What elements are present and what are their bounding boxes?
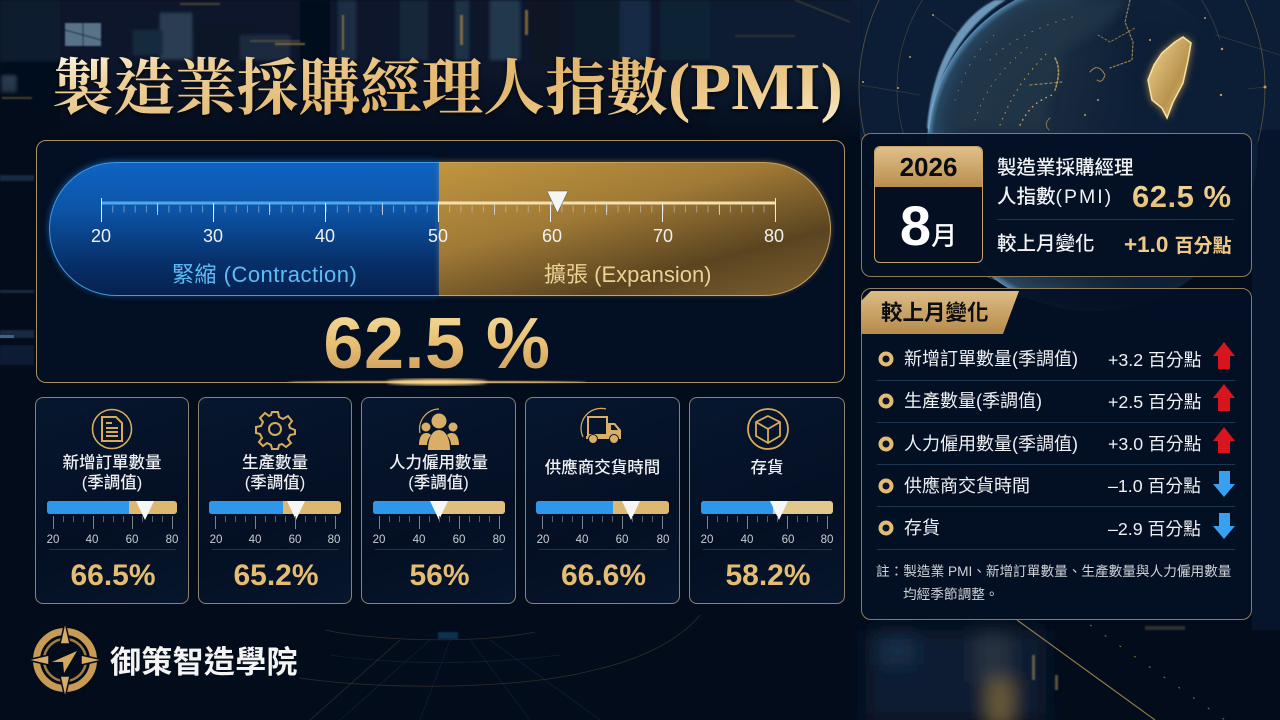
label: 人力僱用數量 — [389, 454, 488, 472]
date badge — [874, 146, 983, 263]
tab heading: 較上月變化 — [881, 301, 989, 325]
bottom-right reflection — [866, 630, 1046, 720]
bright factory window — [65, 23, 101, 46]
PMI label: 人指數(PMI) — [997, 186, 1113, 208]
down arrows — [1213, 471, 1235, 539]
main scale: 60 — [542, 226, 562, 246]
label — [242, 454, 308, 492]
card: employment — [361, 397, 516, 604]
slider: 60 — [616, 534, 628, 546]
change label: 較上月變化 — [997, 233, 1095, 255]
panel: change from last month: +2.5 百分點 — [1108, 392, 1201, 412]
main marker — [547, 191, 568, 213]
PMI label — [997, 157, 1134, 208]
year — [875, 147, 982, 187]
contraction half — [49, 162, 439, 296]
up arrows — [1213, 342, 1235, 453]
expansion half — [439, 162, 831, 296]
icon: truck — [580, 408, 621, 443]
icon: document — [92, 408, 132, 450]
footnote: 註：製造業 PMI、新增訂單數量、生產數量與人力僱用數量 — [876, 564, 1231, 579]
slider: 20 — [537, 534, 549, 546]
tab heading — [861, 291, 1019, 334]
bullets — [880, 354, 892, 534]
panel: change from last month: +3.0 百分點 — [1108, 434, 1201, 454]
slider: 80 — [493, 534, 505, 546]
slider: 40 — [576, 534, 588, 546]
value: 56% — [409, 559, 470, 592]
slider: 80 — [657, 534, 669, 546]
row 3: 人力僱用數量(季調值) — [904, 434, 1078, 454]
city lights — [955, 0, 1135, 130]
label: 存貨 — [750, 459, 784, 477]
label — [62, 454, 162, 492]
label: (季調值) — [82, 474, 142, 492]
slider: 60 — [126, 534, 138, 546]
label: 供應商交貨時間 — [545, 459, 660, 477]
slider: 40 — [86, 534, 98, 546]
label: (季調值) — [245, 474, 305, 492]
main scale: 20 — [91, 226, 111, 246]
slider: 80 — [166, 534, 178, 546]
footnote — [876, 564, 1231, 602]
main scale — [91, 190, 784, 386]
month: 8月 — [900, 194, 957, 257]
slider: 20 — [210, 534, 222, 546]
row 2: 生產數量(季調值) — [904, 391, 1042, 411]
icon: gear — [255, 411, 296, 450]
card: supplier delivery time — [525, 397, 680, 604]
panel: change from last month: +3.2 百分點 — [1108, 350, 1201, 370]
slider: 40 — [741, 534, 753, 546]
title: 製造業採購經理人指數(PMI) — [52, 50, 843, 124]
slider: 20 — [47, 534, 59, 546]
label: (季調值) — [408, 474, 469, 492]
slider — [47, 501, 178, 550]
icon: Taiwan map — [1142, 32, 1196, 120]
land glow — [950, 0, 1130, 132]
slider — [373, 501, 505, 550]
big value: 62.5 % — [323, 304, 551, 384]
card: production — [198, 397, 352, 604]
panel: change from last month: –1.0 百分點 — [1108, 476, 1201, 496]
main scale: 70 — [653, 226, 673, 246]
card: inventories — [689, 397, 845, 604]
row 1: 新增訂單數量(季調值) — [904, 349, 1078, 369]
slider: 20 — [701, 534, 713, 546]
footnote: 均經季節調整。 — [903, 586, 998, 602]
expansion label: 擴張 (Expansion) — [544, 262, 712, 287]
slider — [701, 501, 833, 550]
slider: 60 — [782, 534, 794, 546]
bottom grid arcs — [300, 615, 700, 720]
label: 新增訂單數量 — [62, 454, 162, 472]
value: 58.2% — [725, 559, 811, 592]
slider: 60 — [453, 534, 465, 546]
label: 生產數量 — [242, 454, 308, 472]
contraction label: 緊縮 (Contraction) — [172, 262, 357, 287]
PMI label: 製造業採購經理 — [997, 157, 1134, 179]
left edge streaks — [0, 175, 34, 365]
slider — [536, 501, 669, 550]
divider — [997, 219, 1234, 220]
slider: 80 — [328, 534, 340, 546]
main scale: 50 — [428, 226, 448, 246]
main scale: 40 — [315, 226, 335, 246]
row 5: 存貨 — [904, 518, 940, 538]
icon: box — [747, 408, 789, 450]
value: 65.2% — [233, 559, 319, 592]
slider — [209, 501, 341, 550]
panel: change from last month — [861, 288, 1252, 620]
main scale: 30 — [203, 226, 223, 246]
value: 66.5% — [70, 559, 156, 592]
slider: 60 — [289, 534, 301, 546]
gauge pill — [44, 156, 834, 300]
brand name: 御策智造學院 — [110, 645, 298, 680]
label — [389, 454, 488, 492]
row 4: 供應商交貨時間 — [904, 476, 1030, 496]
slider: 40 — [249, 534, 261, 546]
panel: main PMI gauge — [36, 140, 845, 383]
slider: 20 — [373, 534, 385, 546]
main scale: 80 — [764, 226, 784, 246]
change value: +1.0 百分點 — [1124, 232, 1232, 257]
logo: compass — [30, 626, 100, 694]
card: new orders — [35, 397, 189, 604]
PMI value: 62.5 % — [1132, 179, 1232, 214]
slider: 40 — [413, 534, 425, 546]
icon: people — [418, 408, 459, 450]
value: 66.6% — [561, 559, 646, 592]
year: 2026 — [900, 152, 957, 182]
rings — [859, 0, 1280, 291]
panel: current month summary — [861, 133, 1252, 277]
panel: change from last month: –2.9 百分點 — [1108, 519, 1201, 539]
slider: 80 — [821, 534, 833, 546]
